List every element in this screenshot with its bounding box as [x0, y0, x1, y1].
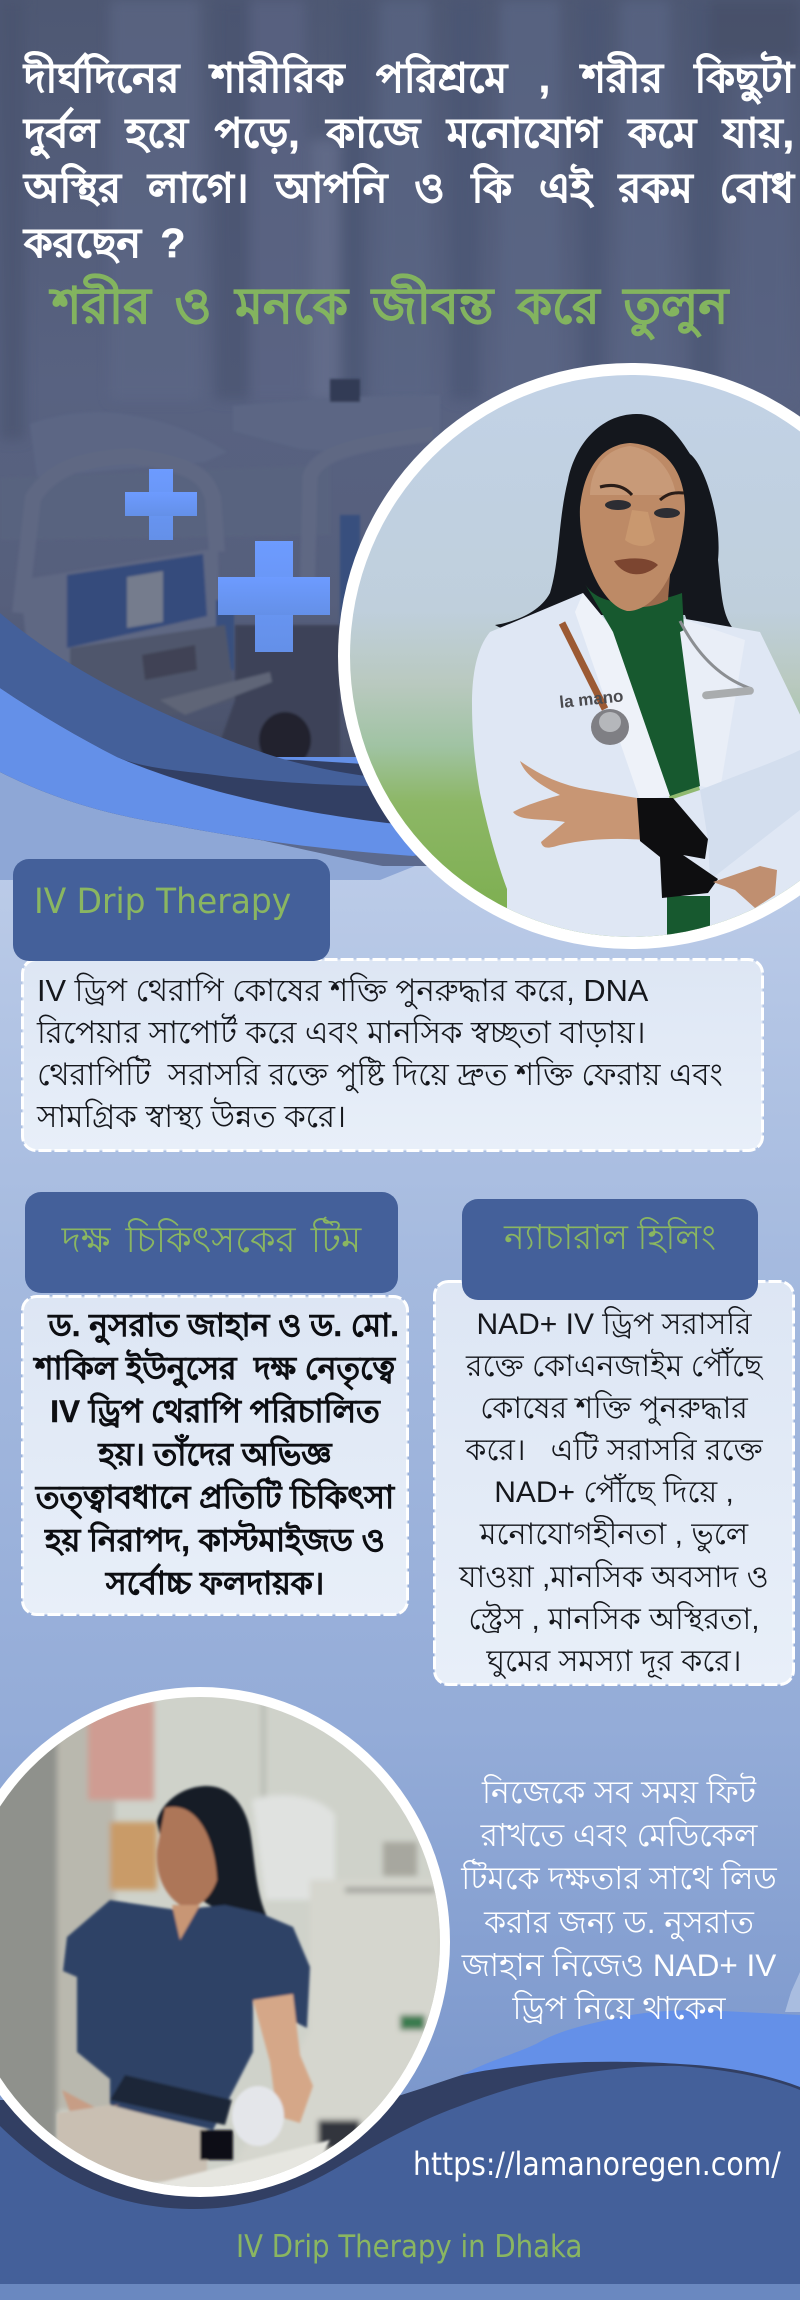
coat — [472, 593, 800, 960]
panel heading: IV Drip Therapy — [13, 859, 330, 961]
text: expert doctors description: ড. নুসরাত জাহান ও ড. মো. শাকিল ইউনুসের দক্ষ নেতৃত্বে IV ড্রিপ থেরাপি পরিচালিত হয়। তাঁদের অভিজ্ঞ তত্ত্বাবধানে প্রতিটি চিকিৎসা হয় নিরাপদ, কাস্টমাইজড ও সর্বোচ্চ ফলদায়ক। — [35, 1307, 399, 1601]
headline question: দীর্ঘদিনের শারীরিক পরিশ্রমে , শরীর কিছুটা — [24, 55, 794, 101]
bed and equipment — [252, 1795, 335, 1900]
green subheading: শরীর ও মনকে জীবন্ত করে তুলুন — [52, 278, 728, 334]
website url: https://lamanoregen.com/ — [413, 2145, 781, 2183]
panel heading: expert doctors team — [25, 1192, 398, 1293]
face — [157, 1807, 217, 1907]
coat logo: la mano — [558, 686, 624, 712]
eyes and brows — [600, 485, 684, 500]
text: doctor takes NAD+ note: নিজেকে সব সময় ফিট রাখতে এবং মেডিকেল টিমকে দক্ষতার সাথে লিড করার জন্য ড. নুসরাত জাহান নিজেও NAD+ IV ড্রিপ নিয়ে থাকেন — [461, 1774, 777, 2026]
panel heading: expert doctors team: দক্ষ চিকিৎসকের টিম — [62, 1219, 361, 1260]
green turtleneck sweater — [585, 584, 700, 796]
bed frames — [20, 456, 217, 613]
panel heading: natural healing — [462, 1199, 758, 1300]
bottom wave shapes — [0, 1972, 800, 2300]
neck and face — [643, 575, 670, 607]
stethoscope — [562, 623, 605, 709]
icon: large medical cross — [218, 541, 330, 652]
panel heading: IV Drip Therapy: IV Drip Therapy — [34, 882, 291, 922]
arm — [253, 1994, 313, 2123]
headline question: করছেন ? — [24, 220, 185, 266]
text: natural healing description: NAD+ IV ড্রিপ সরাসরি রক্তে কোএনজাইম পৌঁছে কোষের শক্তি পুনরুদ্ধার করে। এটি সরাসরি রক্তে NAD+ পৌঁছে দিয়ে , মনোযোগহীনতা , ভুলে যাওয়া ,মানসিক অবসাদ ও স্ট্রেস , মানসিক অস্থিরতা, ঘুমের সমস্যা দূর করে। — [459, 1308, 769, 1678]
hand on arm — [513, 761, 647, 848]
bed pillows and mattresses — [30, 412, 227, 477]
floral curtain — [88, 1700, 154, 1800]
doctor portrait circle — [338, 363, 800, 960]
hair — [157, 1786, 267, 1917]
black cuff — [637, 798, 718, 898]
armrest cushion — [232, 2086, 284, 2146]
hair — [495, 414, 732, 628]
lips — [614, 558, 658, 574]
headline question: দুর্বল হয়ে পড়ে, কাজে মনোযোগ কমে যায়, — [24, 110, 794, 156]
top wave shapes — [0, 613, 470, 880]
hospital ward background photo — [0, 0, 800, 860]
navy shirt — [63, 1900, 310, 2130]
footer caption: IV Drip Therapy in Dhaka — [236, 2229, 582, 2265]
panel: IV drip description box — [22, 960, 762, 1150]
panel: natural healing box — [434, 1282, 794, 1684]
text: IV drip description: IV ড্রিপ থেরাপি কোষের শক্তি পুনরুদ্ধার করে, DNA রিপেয়ার সাপোর্ট করে এবং মানসিক স্বচ্ছতা বাড়ায়। থেরাপিটি সরাসরি রক্তে পুষ্টি দিয়ে দ্রুত শক্তি ফেরায় এবং সামগ্রিক স্বাস্থ্য উন্নত করে। — [37, 973, 723, 1134]
headline question: অস্থির লাগে। আপনি ও কি এই রকম বোধ — [24, 165, 794, 211]
headline question — [22, 50, 796, 266]
panel: expert doctors box — [22, 1296, 408, 1614]
panel heading: natural healing: ন্যাচারাল হিলিং — [504, 1219, 716, 1257]
icon: small medical cross — [125, 469, 197, 540]
right hand — [713, 866, 777, 908]
lap — [57, 2105, 207, 2185]
IV drip patient photo circle — [0, 1680, 450, 2200]
